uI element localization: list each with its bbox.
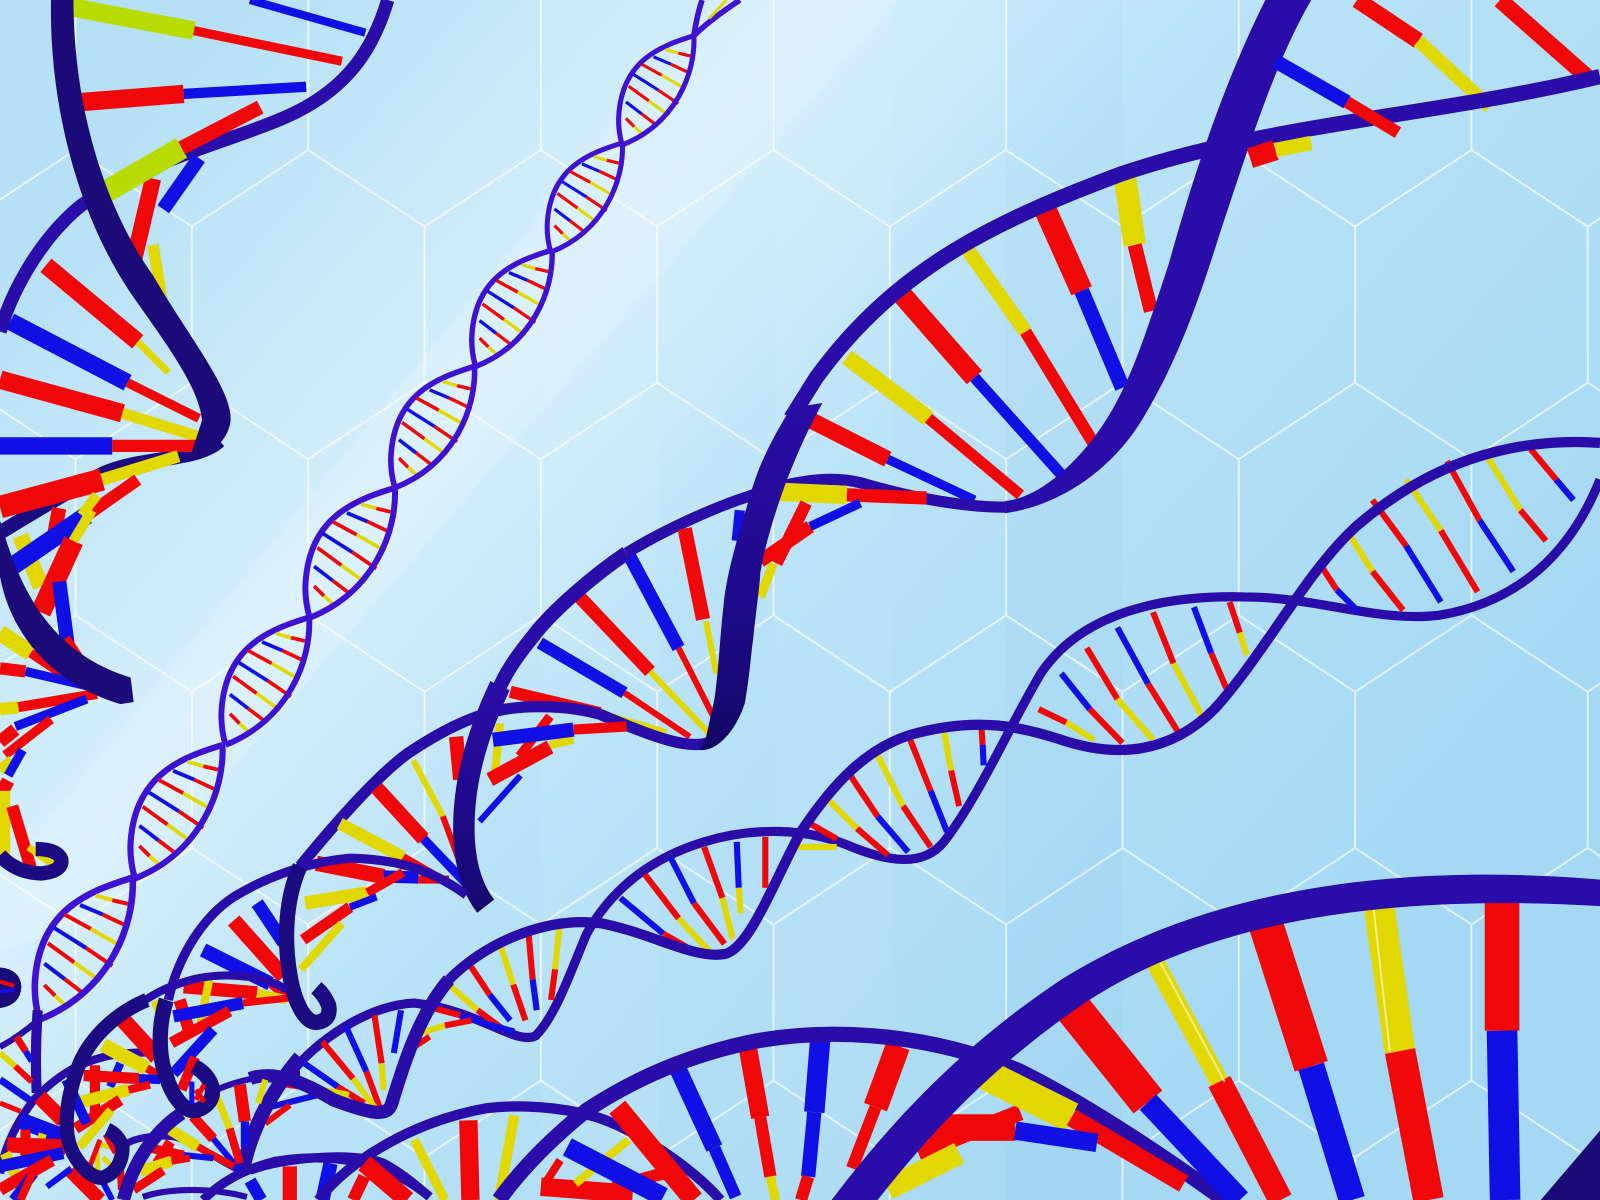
rungs behind ribbon [71, 0, 365, 308]
left helix, top [0, 0, 388, 1008]
lower arc rungs [364, 1115, 514, 1200]
lower fan rungs [0, 633, 97, 869]
curl rungs [0, 982, 14, 992]
strand: front [449, 442, 1600, 980]
ribbon: dark descending from top strand [700, 403, 822, 750]
strand: tail ribbon 2 [243, 1057, 300, 1170]
strand: tail ribbon [250, 980, 449, 1112]
fourth fan rungs [157, 903, 289, 1090]
second fan rungs [510, 529, 716, 737]
third-fan back rungs [456, 716, 627, 821]
rungs [265, 449, 1573, 1123]
lower back strand [0, 441, 219, 533]
ribbon tip at 310,1005 [287, 866, 329, 1022]
ribbon: front, wide [1005, 0, 1311, 513]
fifth fan rungs [66, 1020, 160, 1147]
fan rungs [0, 265, 212, 668]
bottom-left cluster of small helices [0, 1037, 430, 1200]
strand: continuation left [627, 479, 1005, 553]
curl at 60,850 [0, 849, 61, 873]
back strands [0, 1052, 430, 1200]
strand: arc to fourth fan [168, 858, 466, 1000]
short rungs over ribbon [1250, 61, 1398, 158]
ribbon tip at 195,1090 [160, 1000, 212, 1111]
curl rungs, small [90, 1082, 204, 1170]
ribbon tip at 100,1150 [67, 1000, 147, 1178]
back strand [0, 0, 388, 332]
front fan rungs [888, 896, 1505, 1200]
ribbon tip at 470,890 [464, 686, 500, 906]
small curl at left edge [0, 967, 21, 1008]
large helix, bottom [250, 875, 1600, 1200]
front ribbon [832, 875, 1600, 1200]
main ribbon [51, 0, 231, 461]
third fan rungs [301, 760, 466, 969]
ribbon 2 with tip [0, 520, 134, 704]
upper fan of rungs [811, 0, 1587, 500]
wide arc strand [499, 1034, 1224, 1200]
strand: back arc to fifth fan [100, 975, 287, 1027]
big fan, back rungs [541, 1037, 898, 1200]
third arc [250, 1157, 430, 1197]
strand: front arc [497, 553, 627, 693]
lower arc strand [318, 1106, 720, 1200]
thin central helix [0, 0, 740, 1093]
tail ribbon [123, 1113, 182, 1200]
corner ribbon [1541, 1131, 1600, 1200]
strand: arc to third fan [300, 707, 714, 866]
strand: back [791, 77, 1600, 418]
medium helix, middle right [243, 442, 1600, 1170]
strand: back [291, 480, 1600, 1073]
behind rungs, second fan [737, 492, 927, 597]
rungs [0, 1037, 364, 1200]
